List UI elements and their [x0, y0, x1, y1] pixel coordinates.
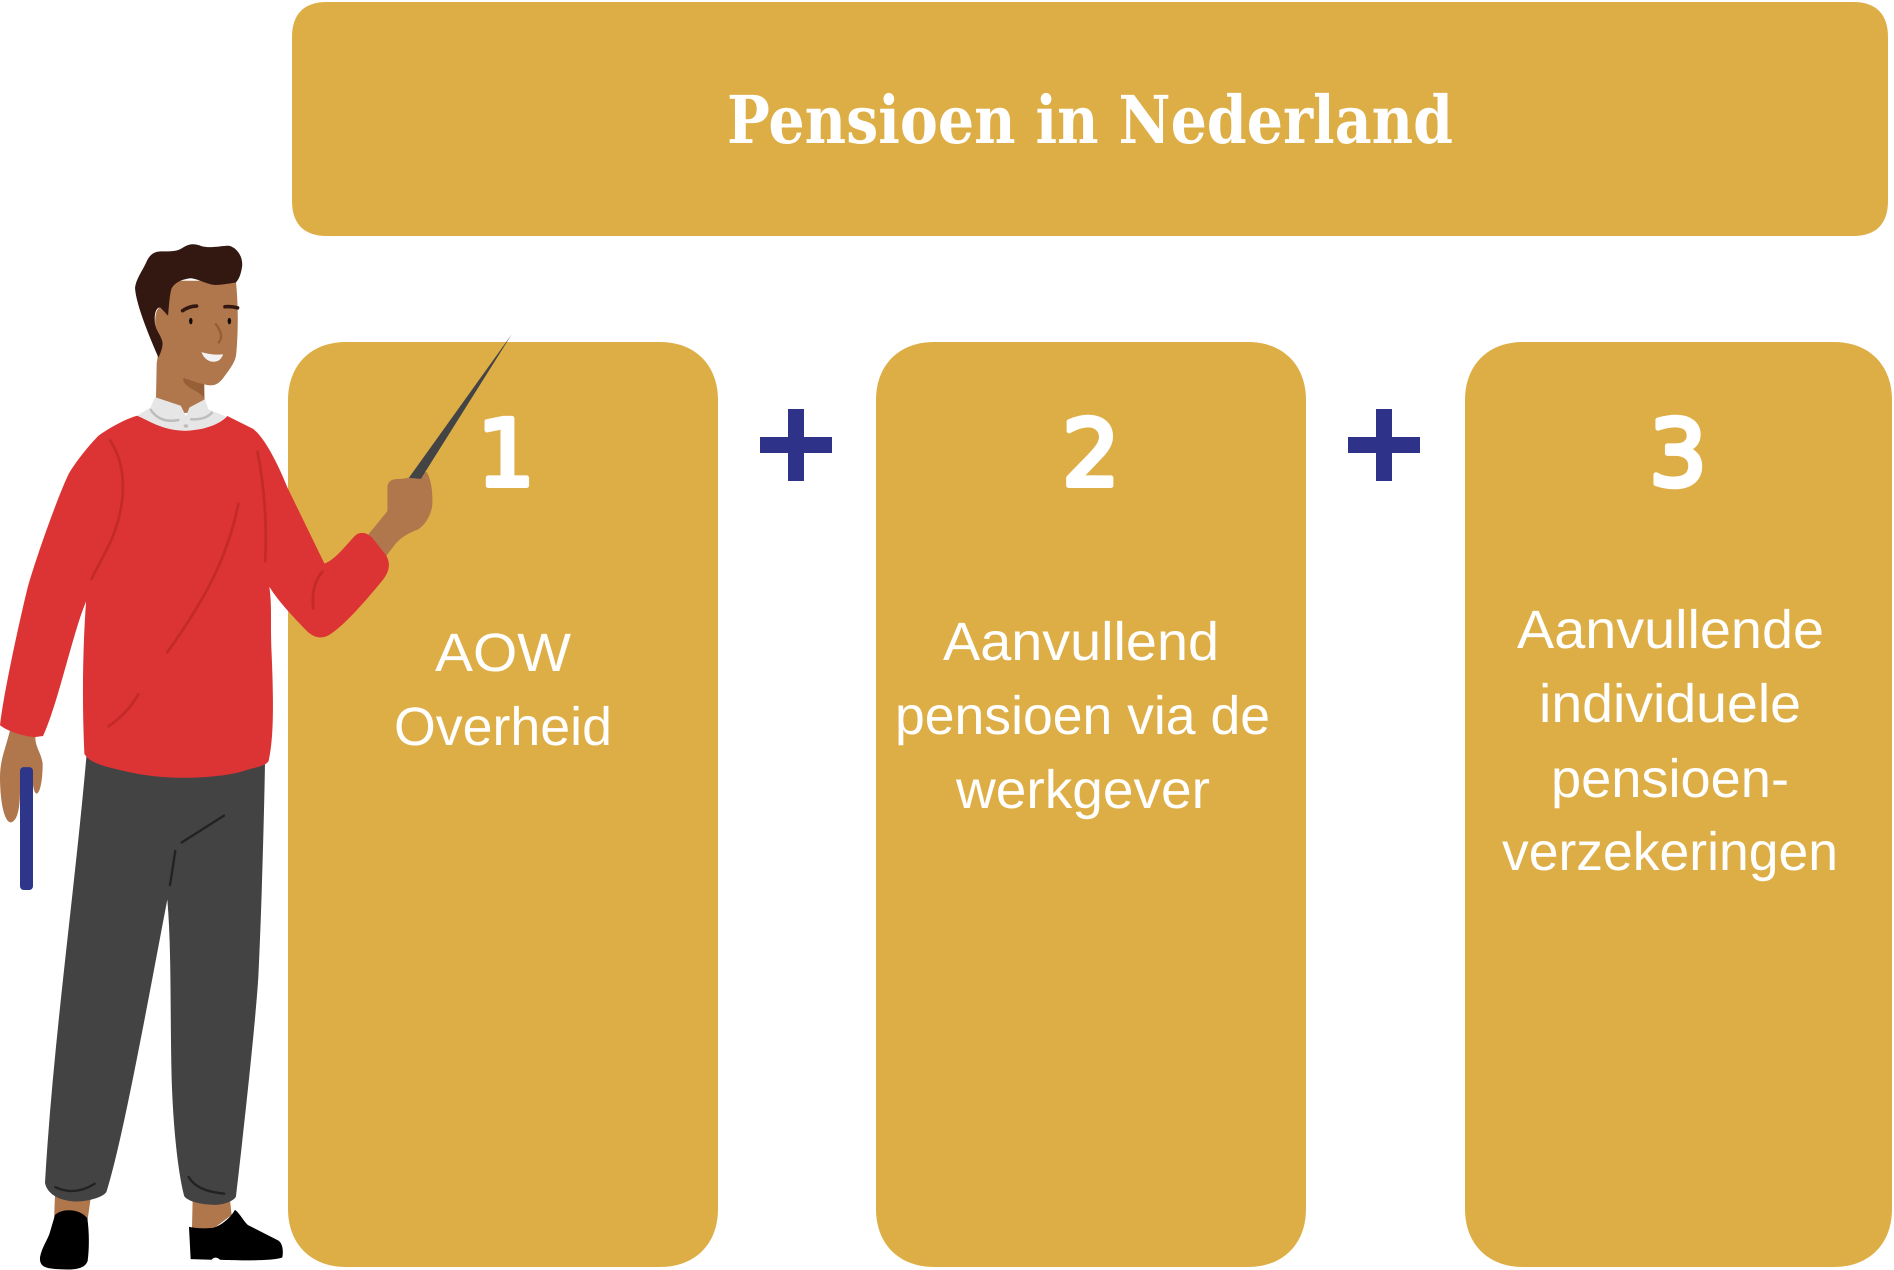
raised hand [369, 472, 432, 556]
trousers [45, 754, 265, 1205]
red sweater [0, 416, 389, 778]
card background [876, 342, 1306, 1267]
line: Aanvullend: Aanvullend [943, 612, 1219, 672]
nose [216, 324, 221, 342]
panel: pillar 2 [876, 342, 1306, 1267]
sweater wrinkles [92, 441, 322, 726]
collar [137, 397, 226, 430]
number 1: 1 [477, 400, 535, 508]
ankles [54, 1195, 232, 1229]
icon: plus 1 [760, 409, 832, 481]
neck shadow [183, 378, 204, 397]
title banner [292, 2, 1888, 236]
blue stick [20, 767, 33, 890]
line: pensioen via de: pensioen via de [895, 686, 1270, 746]
illustration: presenter with pointer [0, 244, 512, 1270]
neck and face [156, 281, 238, 413]
trouser creases [55, 816, 224, 1194]
title: Pensioen in Nederland [727, 81, 1453, 159]
text: Aanvullende individuele pensioen-verzekeringen [1502, 600, 1838, 882]
eyes [189, 318, 231, 324]
eyebrows [183, 306, 238, 311]
line: Overheid: Overheid [394, 697, 612, 757]
pointer stick [409, 334, 512, 479]
line: verzekeringen: verzekeringen [1502, 822, 1838, 882]
ear [155, 307, 172, 363]
line: individuele: individuele [1539, 674, 1801, 734]
left shoe [40, 1210, 89, 1270]
card background [1465, 342, 1892, 1267]
icon: plus 2 [1348, 409, 1420, 481]
line: pensioen-: pensioen- [1551, 749, 1789, 809]
panel: pillar 3 [1465, 342, 1892, 1267]
hair [135, 244, 242, 357]
number 2: 2 [1062, 400, 1120, 508]
number 3: 3 [1649, 400, 1707, 508]
line: AOW: AOW [435, 623, 571, 683]
right shoe [189, 1210, 283, 1260]
lower body [0, 730, 283, 1270]
line: werkgever: werkgever [955, 760, 1210, 820]
hanging hand [0, 730, 43, 822]
card background [288, 342, 718, 1267]
smile [201, 352, 223, 362]
collar button [184, 424, 188, 428]
upper body [0, 244, 512, 778]
collar folds [151, 410, 212, 421]
banner background [292, 2, 1888, 236]
text: Aanvullend pensioen via de werkgever [895, 612, 1270, 820]
line: Aanvullende: Aanvullende [1517, 600, 1824, 660]
panel: pillar 1 [288, 342, 718, 1267]
text: AOW Overheid [394, 623, 612, 757]
